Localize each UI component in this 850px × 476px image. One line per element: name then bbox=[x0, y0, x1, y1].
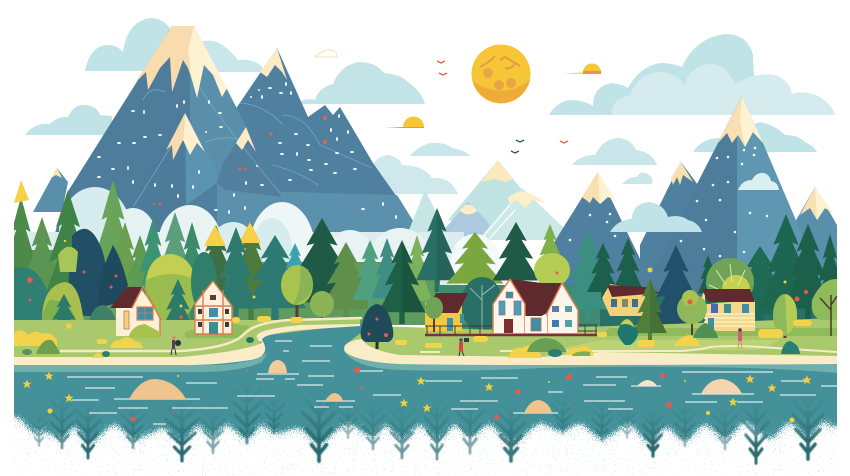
mountain: inner peak bbox=[217, 127, 283, 197]
mountain: main peak bbox=[50, 26, 300, 250]
snow hills behind the forest bbox=[14, 187, 500, 285]
cloud: small central bbox=[410, 143, 470, 156]
house: half-timbered bbox=[193, 281, 232, 334]
mountains: left range bbox=[50, 26, 436, 250]
green bushes bbox=[22, 323, 800, 357]
pale mountain: tall bbox=[448, 160, 550, 240]
cloud: center bbox=[297, 62, 425, 104]
mountain: right small peak bbox=[795, 187, 837, 300]
light band under sand, left bbox=[14, 352, 268, 372]
cloud: right large back bbox=[549, 34, 756, 115]
sand bank: left bbox=[14, 324, 360, 365]
small setting suns bbox=[386, 64, 601, 128]
house: striped right bbox=[698, 289, 755, 331]
snow flecks right bbox=[569, 147, 768, 257]
snow caps right bbox=[582, 96, 833, 220]
snow flecks bbox=[97, 82, 397, 219]
pale mountain: left bbox=[405, 190, 450, 240]
ground darker patches bbox=[185, 322, 837, 350]
ground bbox=[14, 318, 837, 360]
house: left cottage bbox=[110, 286, 160, 338]
lower water fade with grainy jagged dissolve bbox=[0, 385, 850, 445]
tree decorations bbox=[27, 240, 786, 329]
ridge lines bbox=[133, 80, 372, 207]
cloud: top left right side bbox=[200, 41, 266, 72]
sun bbox=[472, 44, 530, 104]
fence and base bbox=[425, 325, 597, 335]
teal conifers in front of round trees bbox=[52, 279, 190, 320]
people bbox=[171, 328, 742, 356]
person: red jacket bbox=[459, 338, 469, 356]
scene clipped to the frame bbox=[0, 180, 850, 463]
water body bbox=[14, 324, 837, 394]
mountain: front peak bbox=[130, 113, 186, 250]
flower bushes yellow bbox=[14, 316, 812, 358]
cloud: left middle bbox=[25, 105, 112, 135]
clouds behind the mountains bbox=[25, 18, 835, 194]
light band under sand, right bbox=[345, 352, 837, 373]
mountain: right big peak bbox=[648, 96, 830, 300]
house: big white bbox=[493, 279, 578, 333]
snow cap: second peak bbox=[260, 48, 287, 80]
cloud: central low bbox=[318, 155, 458, 194]
back row of conifers, middle bbox=[214, 208, 564, 322]
rocks in the lake bbox=[129, 360, 742, 413]
pale mountain: blue bbox=[435, 202, 495, 240]
person: left bank hiker bbox=[171, 336, 181, 355]
mountain: second peak bbox=[235, 48, 397, 197]
mountain: central peak bbox=[540, 172, 660, 300]
snow cap: front peak bbox=[166, 113, 205, 160]
water ripples bbox=[67, 341, 837, 424]
house: yellow left bbox=[425, 293, 468, 332]
round trees on the right bank bbox=[677, 279, 837, 338]
dark conifers, centre bbox=[379, 240, 425, 324]
cloud: outlined small bbox=[315, 50, 337, 57]
birds bbox=[437, 61, 568, 153]
sand bank: right bbox=[344, 339, 837, 365]
red dots on the mountain bbox=[153, 116, 327, 205]
lake and sand bbox=[0, 322, 850, 445]
pale mountain: white capped bbox=[478, 188, 565, 240]
mountain: back peak bbox=[640, 162, 720, 300]
cloud: top left bbox=[85, 18, 172, 71]
cloud on the mountain bbox=[738, 173, 779, 190]
reflected ferns bbox=[30, 398, 824, 466]
snow cap: main peak bbox=[135, 26, 227, 98]
yellow tree tops bbox=[14, 180, 261, 246]
green sunburst tree bbox=[706, 258, 754, 306]
cloud: in front of peaks bbox=[610, 202, 702, 232]
foreground conifers on the right bank bbox=[618, 279, 667, 345]
garden paths bbox=[60, 318, 837, 352]
round trees and blobs, left bbox=[14, 228, 217, 320]
house: yellow back bbox=[602, 284, 660, 316]
mountains: pale distant range bbox=[405, 160, 565, 240]
mountains: far left small bbox=[33, 168, 68, 212]
snow cap: inner peak bbox=[236, 127, 256, 152]
mountain: lower right ridge bbox=[217, 183, 436, 250]
cloud: behind right mountain bbox=[693, 122, 817, 152]
round trees, centre and right bbox=[281, 253, 570, 332]
back row of conifers, left side bbox=[14, 180, 262, 320]
navy pear tree bbox=[361, 304, 393, 349]
right forest conifers bbox=[569, 214, 837, 324]
cloud: tiny bbox=[622, 173, 652, 184]
cloud: right large middle bbox=[612, 64, 835, 115]
mountains: right range bbox=[540, 96, 837, 300]
person: pink backpack bbox=[738, 328, 742, 349]
stars and blossoms on water bbox=[22, 367, 812, 443]
cloud: middle right bbox=[572, 138, 657, 165]
back green filler bbox=[14, 250, 837, 330]
